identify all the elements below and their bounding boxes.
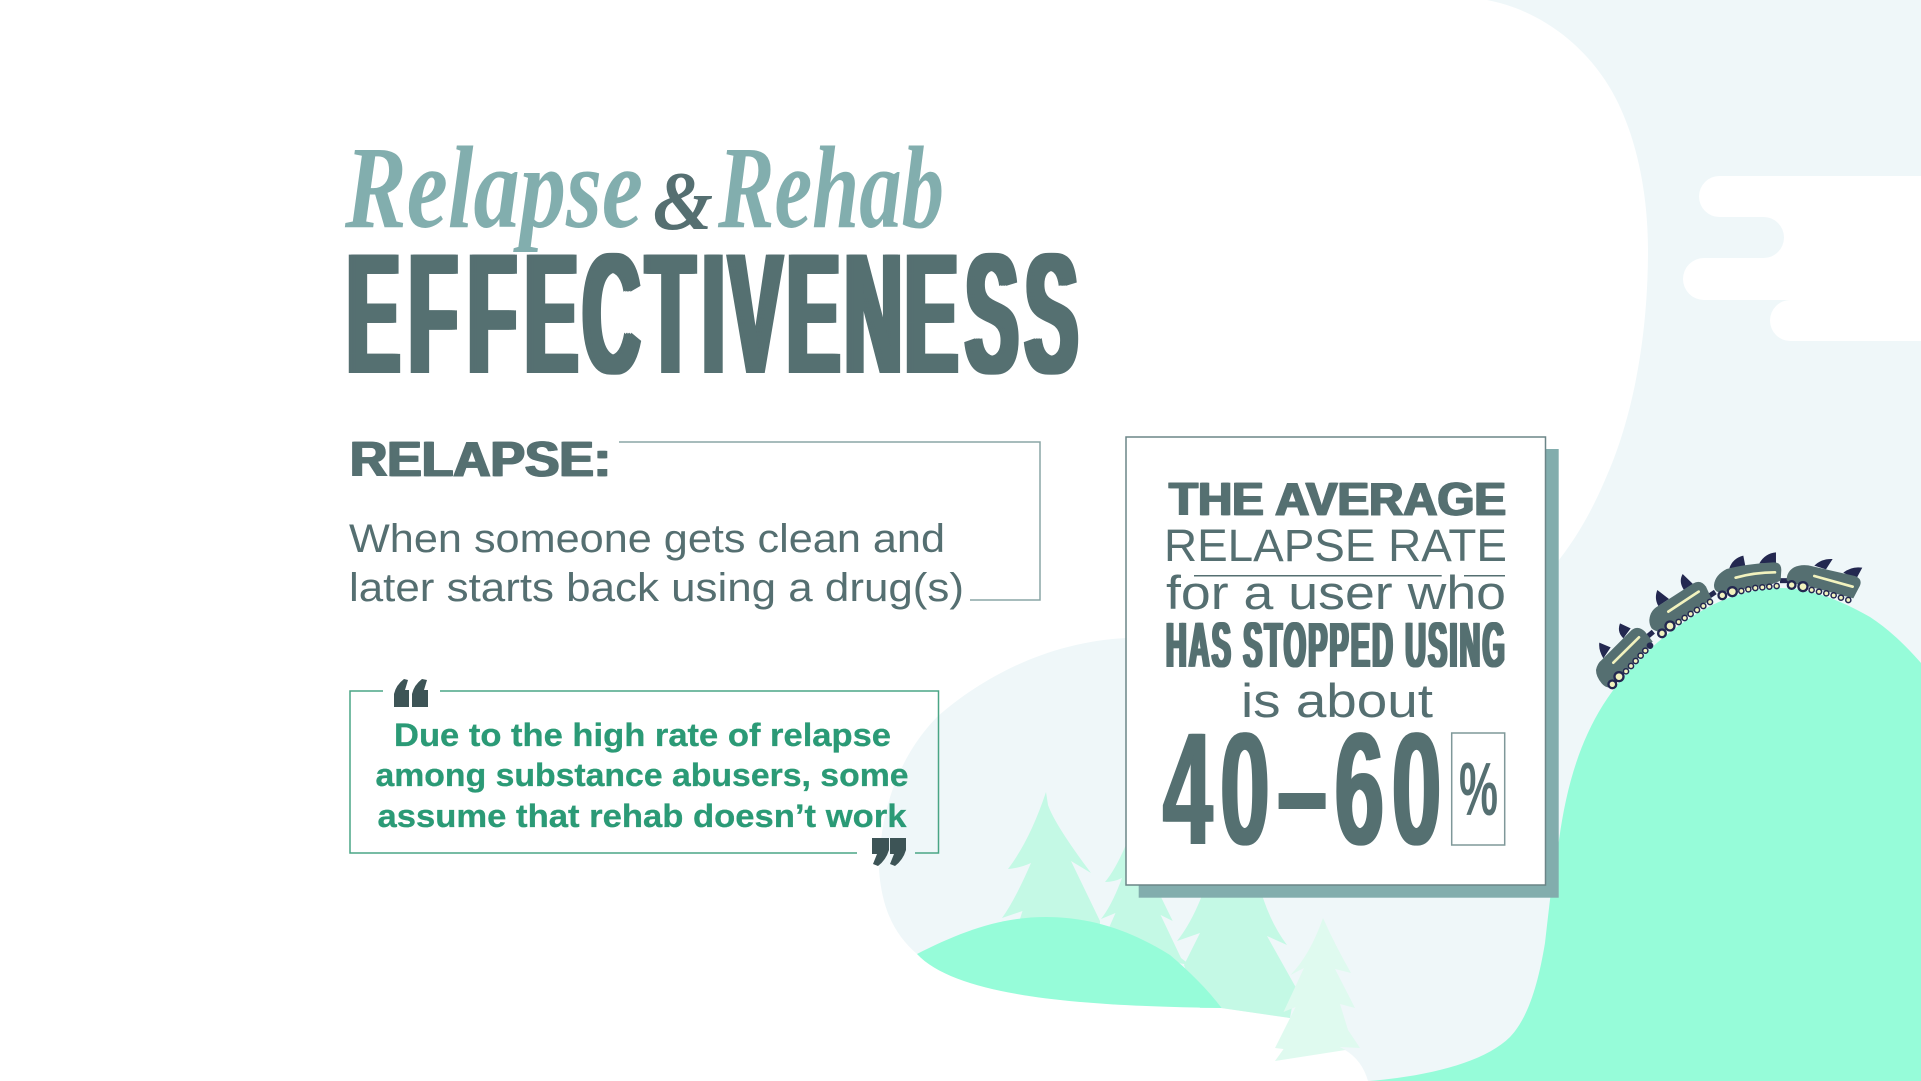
big mint hill bbox=[1369, 588, 1921, 1081]
trees bbox=[1002, 790, 1360, 1061]
percent box: % bbox=[1459, 747, 1498, 831]
title script line: Relapse bbox=[344, 122, 643, 253]
icon: closing quote mark bbox=[872, 838, 906, 866]
line: is about: is about bbox=[1241, 674, 1433, 727]
clouds bbox=[1680, 176, 1921, 341]
definition body: later starts back using a drug(s) bbox=[349, 566, 964, 610]
coaster car 2 bbox=[1649, 574, 1713, 638]
title script line bbox=[344, 122, 944, 253]
panel: relapse rate statistic: HAS STOPPED USING bbox=[1166, 609, 1507, 681]
percent box bbox=[1452, 733, 1505, 845]
panel shadow bbox=[1139, 449, 1559, 898]
quote text: among substance abusers, some bbox=[376, 757, 908, 793]
coaster car 4 bbox=[1787, 559, 1862, 603]
statistic number: 40–60 bbox=[1163, 699, 1449, 878]
coaster car 3 bbox=[1714, 552, 1781, 600]
roller coaster train bbox=[1596, 552, 1862, 689]
title script line: Rehab bbox=[717, 122, 944, 253]
quote frame bbox=[350, 691, 938, 853]
tree: pale foreground bbox=[1275, 918, 1360, 1061]
panel card bbox=[1126, 437, 1546, 885]
panel: quote bbox=[350, 679, 938, 866]
icon: opening quote mark bbox=[394, 679, 428, 707]
tree: back right bbox=[1101, 790, 1190, 965]
small mint hill bbox=[917, 917, 1222, 1008]
quote text: assume that rehab doesn’t work bbox=[378, 798, 907, 834]
line: for a user who: for a user who bbox=[1166, 566, 1506, 619]
tree: front left bbox=[1002, 792, 1100, 925]
coaster connectors bbox=[1647, 581, 1788, 637]
coaster car 1 bbox=[1596, 623, 1653, 689]
panel: relapse rate statistic bbox=[1126, 437, 1559, 898]
panel: relapse definition bbox=[349, 433, 1040, 610]
quote text bbox=[376, 717, 908, 834]
definition heading: RELAPSE: bbox=[350, 433, 611, 487]
tree: large centre bbox=[1177, 790, 1296, 1018]
title bbox=[344, 122, 1078, 410]
line: the average: THE AVERAGE bbox=[1169, 473, 1506, 525]
title main word: EFFECTIVENESS bbox=[347, 219, 1078, 410]
rule above user line bbox=[1194, 575, 1505, 577]
title script line: & bbox=[653, 155, 713, 248]
definition body: When someone gets clean and bbox=[349, 517, 945, 561]
line: relapse rate: RELAPSE RATE bbox=[1164, 520, 1507, 571]
quote text: Due to the high rate of relapse bbox=[394, 717, 891, 753]
definition bracket bbox=[619, 442, 1040, 600]
background: pale sky shape bbox=[879, 0, 1921, 1081]
definition body bbox=[349, 517, 964, 610]
